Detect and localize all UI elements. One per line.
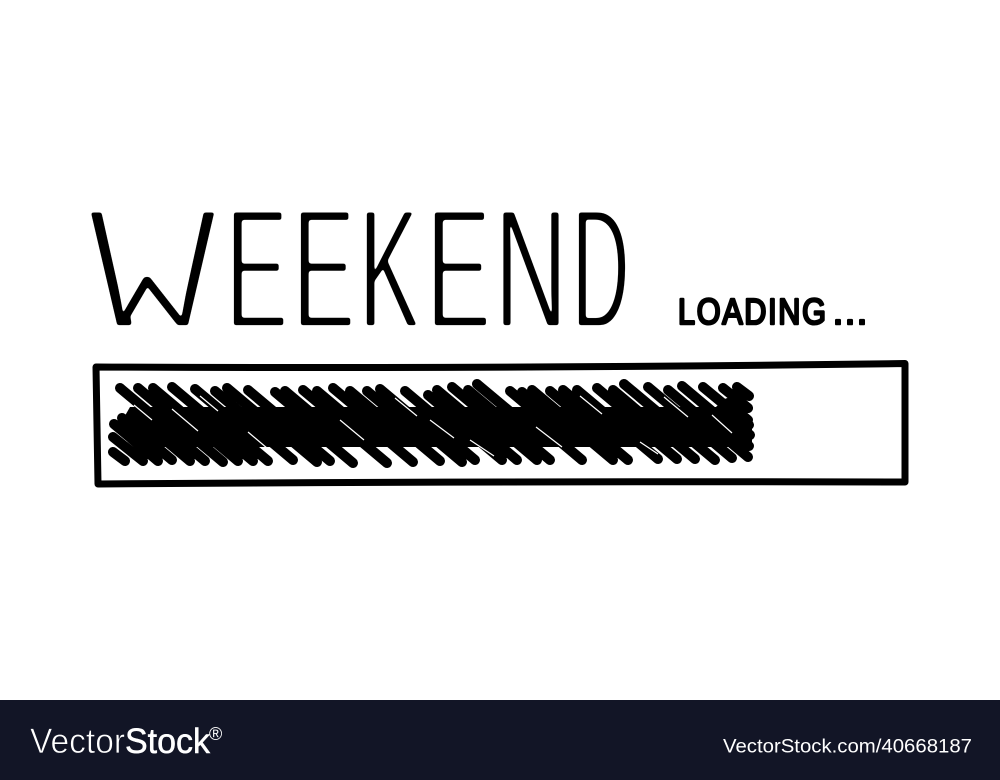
title: WEEKEND: E <box>426 173 491 365</box>
title: WEEKEND: N <box>494 172 567 365</box>
footer logo: VectorStock <box>30 722 222 761</box>
thin white gaps in scribble <box>134 396 732 456</box>
title: WEEKEND: D <box>572 174 629 365</box>
footer logo: VectorStock: Stock <box>125 722 210 761</box>
progress bar frame <box>96 364 905 484</box>
solid core of scribble <box>118 407 752 447</box>
footer logo: VectorStock: Vector <box>30 722 125 761</box>
scribble strokes from top <box>120 384 749 437</box>
label: LOADING...: ... <box>833 291 867 332</box>
title: WEEKEND: W <box>88 173 217 365</box>
title: WEEKEND: E <box>226 174 288 365</box>
scribble strokes from bottom <box>113 400 750 463</box>
title: WEEKEND: E <box>293 174 355 365</box>
label: LOADING...: LOADING <box>678 293 826 333</box>
progress bar scribble fill <box>113 384 752 463</box>
footer image id: VectorStock.com/40668187 <box>723 736 972 758</box>
footer logo: VectorStock: ® <box>209 724 222 744</box>
title: WEEKEND: K <box>359 173 420 365</box>
footer bar <box>0 700 1000 780</box>
title: WEEKEND <box>88 172 629 365</box>
